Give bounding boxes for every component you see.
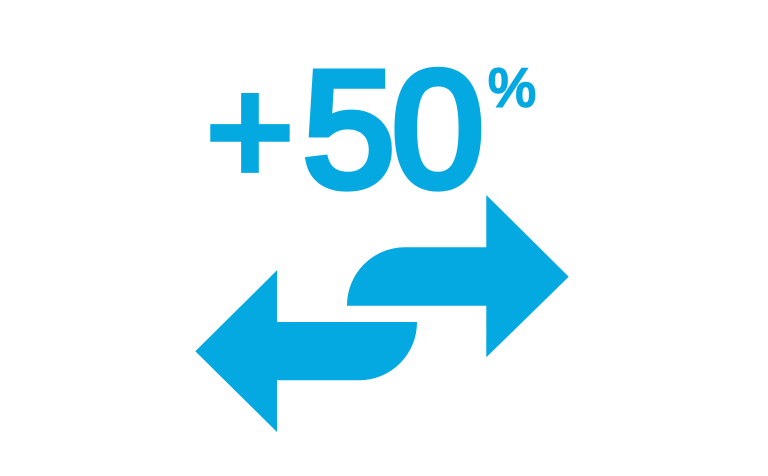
percent sign: % [488,58,536,118]
number 50: 50 [303,37,484,221]
headline: +50% [206,37,536,221]
arrow pointing left [195,270,417,432]
arrow pointing right [347,195,569,357]
plus sign: + [206,48,294,214]
icon: opposing exchange arrows [195,195,569,432]
